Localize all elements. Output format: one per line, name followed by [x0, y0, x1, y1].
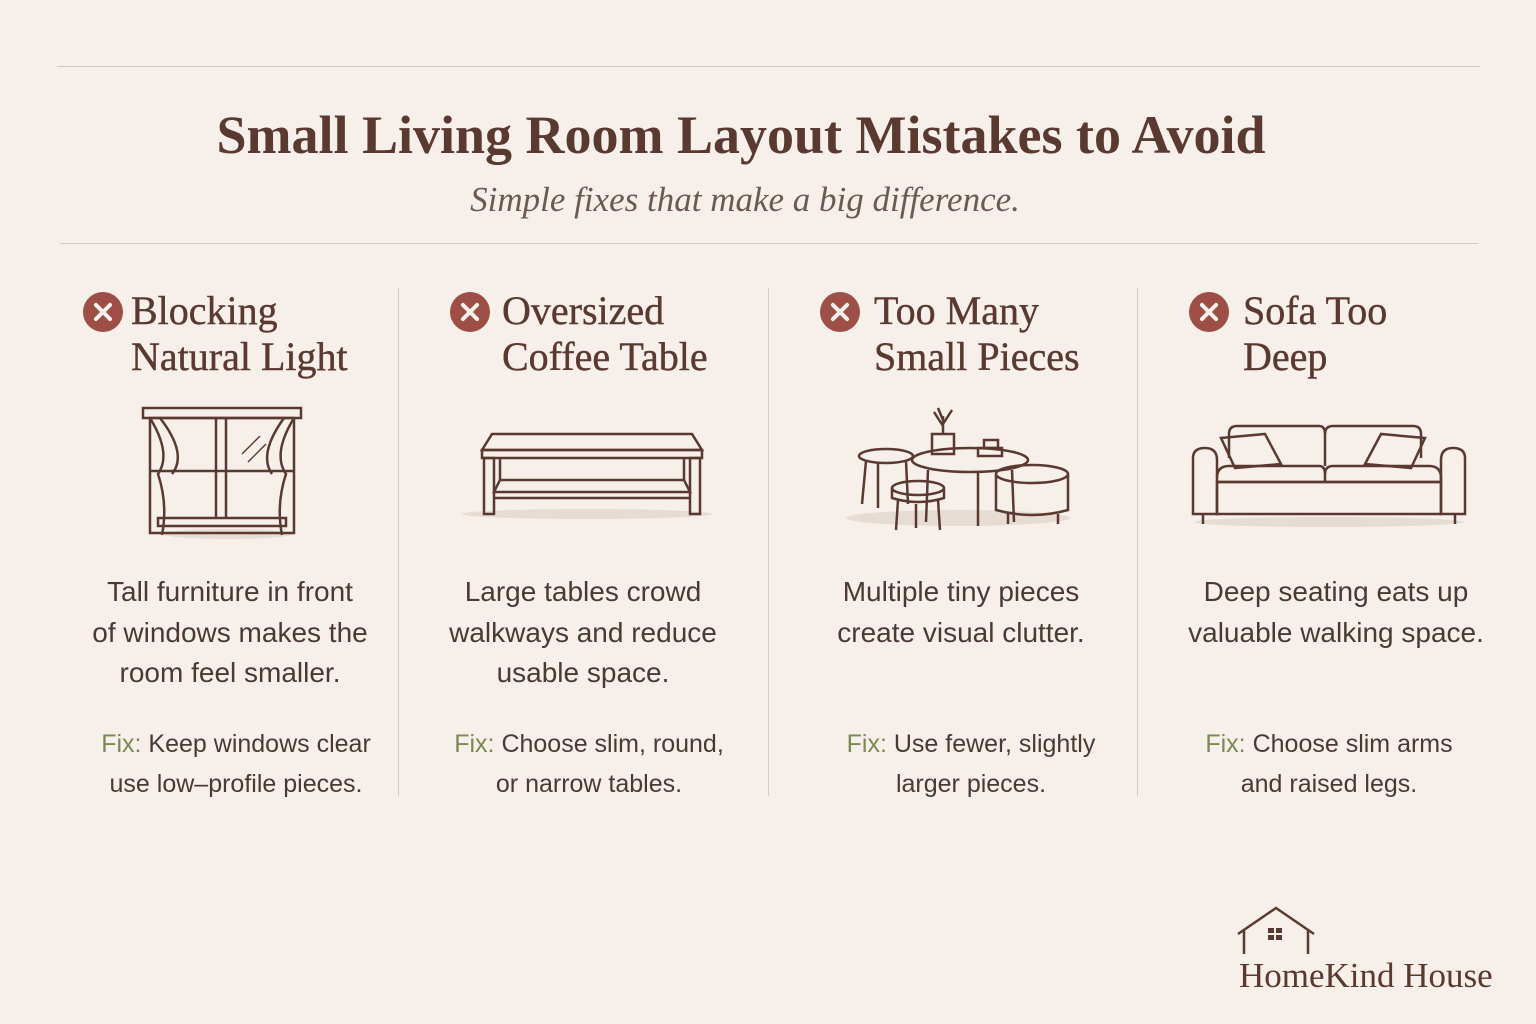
description: Deep seating eats up	[1204, 576, 1468, 607]
icon: window with curtains	[142, 406, 302, 539]
heading	[131, 288, 348, 379]
fix	[1205, 730, 1453, 798]
heading: Oversized	[502, 288, 664, 333]
description: valuable walking space.	[1188, 616, 1484, 648]
icon: sofa	[1192, 424, 1466, 527]
description: Tall furniture in front	[107, 576, 353, 607]
icon: house	[1237, 906, 1315, 954]
icon: coffee table	[462, 432, 712, 519]
heading: Blocking	[131, 288, 278, 333]
brand name: HomeKind House	[1239, 956, 1493, 995]
heading: Coffee Table	[502, 334, 708, 379]
fix: use low–profile pieces.	[110, 770, 362, 798]
description: walkways and reduce	[449, 616, 717, 648]
title: Small Living Room Layout Mistakes to Avoid	[216, 105, 1266, 165]
fix	[101, 730, 371, 798]
icon: x mark	[83, 292, 123, 332]
heading: Sofa Too	[1243, 288, 1387, 333]
description: usable space.	[497, 657, 669, 688]
description: Large tables crowd	[465, 576, 701, 607]
description	[92, 576, 368, 688]
logo	[1237, 906, 1493, 995]
description	[1188, 576, 1484, 648]
description: of windows makes the	[92, 616, 368, 648]
heading: Natural Light	[131, 334, 348, 379]
heading: Small Pieces	[874, 334, 1080, 379]
heading: Deep	[1243, 334, 1327, 379]
fix: Fix: Choose slim arms	[1205, 730, 1453, 758]
icon: x mark	[820, 292, 860, 332]
description: room feel smaller.	[120, 657, 340, 688]
heading	[874, 288, 1080, 379]
description	[837, 576, 1085, 648]
description: create visual clutter.	[837, 616, 1085, 648]
panel: too many small pieces	[820, 288, 1096, 798]
description: Multiple tiny pieces	[843, 576, 1079, 607]
panel: sofa too deep	[1188, 288, 1484, 798]
heading	[1243, 288, 1387, 379]
fix	[847, 730, 1096, 798]
heading	[502, 288, 708, 379]
panel: blocking natural light	[83, 288, 371, 798]
icon: x mark	[1189, 292, 1229, 332]
panel: oversized coffee table	[449, 288, 724, 798]
icon: x mark	[450, 292, 490, 332]
fix	[454, 730, 724, 798]
subtitle: Simple fixes that make a big difference.	[470, 180, 1020, 219]
fix: and raised legs.	[1241, 770, 1417, 798]
heading: Too Many	[874, 288, 1039, 333]
fix: Fix: Use fewer, slightly	[847, 730, 1095, 758]
fix: larger pieces.	[896, 770, 1046, 798]
fix: or narrow tables.	[496, 770, 682, 798]
icon: small tables and stools	[846, 408, 1070, 530]
fix: Fix: Choose slim, round,	[454, 730, 724, 758]
description	[449, 576, 717, 688]
fix: Fix: Keep windows clear	[101, 730, 371, 758]
